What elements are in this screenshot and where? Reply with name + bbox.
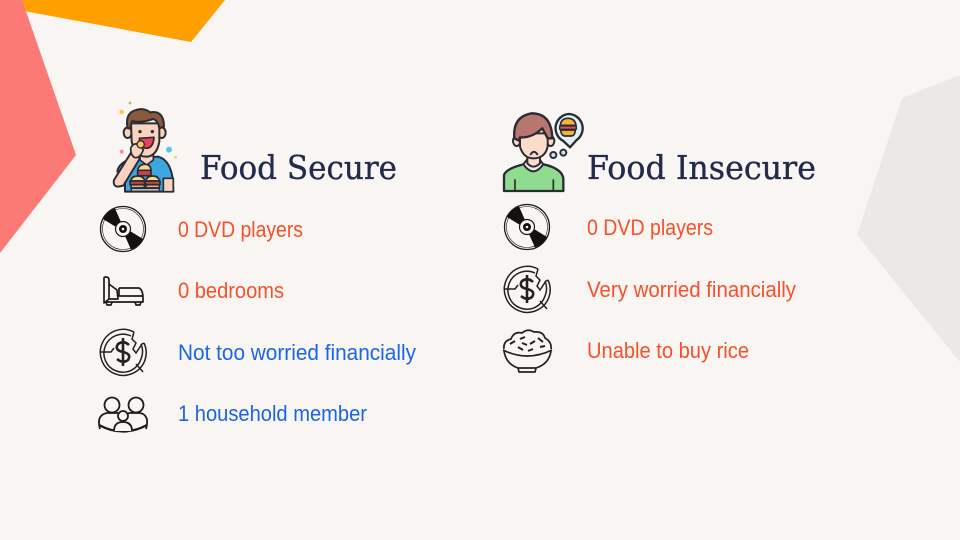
panel: food insecure: [503, 113, 816, 372]
text: not too worried financially: Not too worried financially: [178, 340, 417, 365]
icon: bed: [104, 277, 143, 305]
icon: cracked coin: [504, 266, 550, 312]
icon: dvd disc: [100, 206, 146, 252]
text: unable to buy rice: Unable to buy rice: [587, 338, 749, 363]
salmon left shape: [0, 0, 76, 253]
text: 0 bedrooms: 0 bedrooms: [178, 278, 284, 303]
icon: rice bowl: [503, 330, 552, 372]
text: 0 DVD players: 0 DVD players: [587, 215, 713, 240]
grey right shape: [857, 75, 960, 362]
icon: man eating burgers: [114, 102, 177, 192]
icon: cracked coin: [100, 329, 146, 375]
icon: dvd disc: [504, 204, 550, 250]
icon: household members: [99, 398, 147, 432]
text: very worried financially: Very worried financially: [587, 277, 797, 302]
orange corner shape: [22, 0, 225, 42]
text: 0 DVD players: 0 DVD players: [178, 217, 303, 242]
heading: food insecure: Food Insecure: [587, 148, 816, 187]
panel: food secure: [99, 102, 417, 431]
heading: food secure: Food Secure: [200, 148, 397, 187]
text: 1 household member: 1 household member: [178, 401, 367, 426]
icon: worried person thinking of burger: [504, 113, 583, 191]
